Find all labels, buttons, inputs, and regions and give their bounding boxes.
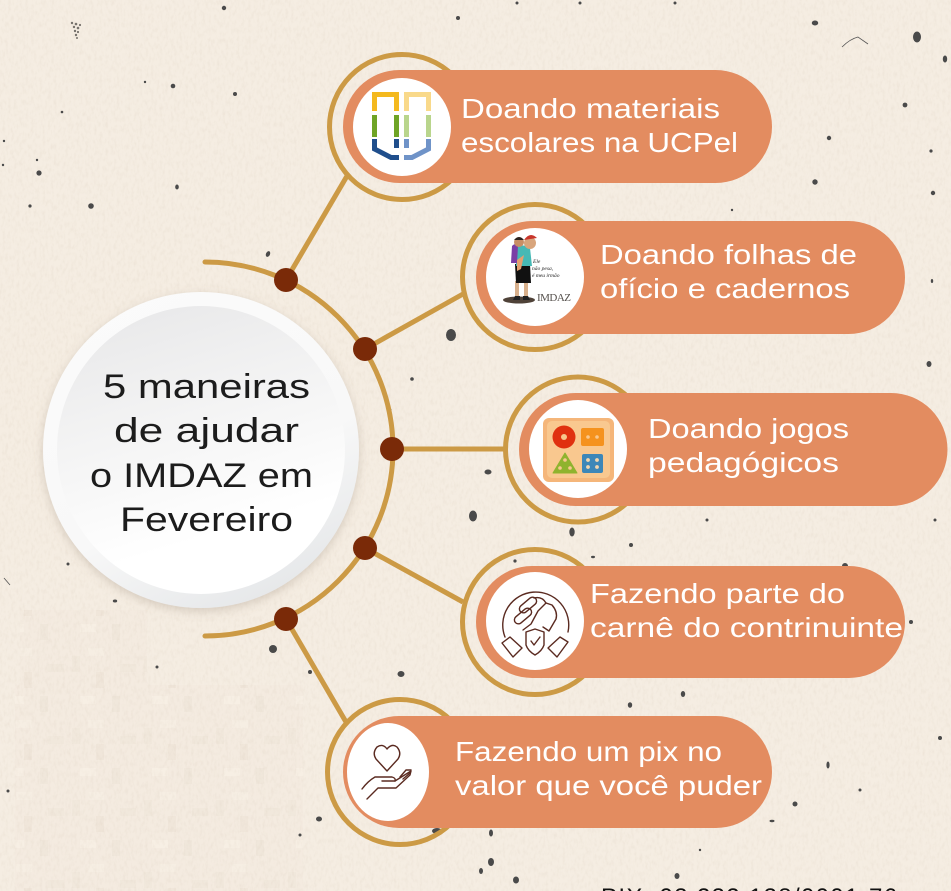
hand-drawn fibre marks [4, 37, 868, 585]
title: 5 maneiras [103, 368, 310, 406]
label: Fazendo um pix no [455, 736, 722, 767]
central circle with title [43, 292, 359, 608]
label [590, 578, 903, 643]
icon: IMDAZ logo [503, 235, 571, 304]
item 3: educational games [506, 377, 948, 522]
label: Doando folhas de [600, 239, 857, 270]
icon: IMDAZ logo: é meu irmão [532, 273, 560, 279]
icon: IMDAZ logo: Ele [532, 259, 541, 265]
icon: IMDAZ logo: IMDAZ [537, 292, 571, 304]
label [600, 239, 857, 304]
label: Doando materiais [461, 93, 720, 124]
label [455, 736, 762, 801]
title: Fevereiro [120, 501, 293, 539]
title: o IMDAZ em [90, 457, 313, 495]
label: escolares na UCPel [461, 127, 738, 158]
label: Fazendo parte do [590, 578, 845, 609]
connector lines [286, 176, 504, 722]
arc nodes [274, 268, 404, 631]
label [648, 413, 849, 478]
label [461, 93, 738, 158]
icon: UCPel logo [374, 94, 428, 158]
title: de ajudar [114, 412, 299, 450]
icon: IMDAZ logo: não pesa, [532, 266, 554, 272]
label: ofício e cadernos [600, 273, 850, 304]
icon: hand holding heart [362, 745, 411, 799]
item 4: contributor booklet [462, 550, 905, 694]
icon: joined hands and shield [502, 592, 569, 657]
label: Doando jogos [648, 413, 849, 444]
item 2: paper and notebooks [462, 204, 905, 350]
title [90, 368, 313, 539]
icon: shape puzzle [543, 418, 614, 482]
central arc [205, 262, 393, 636]
label: valor que você puder [455, 770, 762, 801]
paint fleck [71, 22, 81, 39]
label: pedagógicos [648, 447, 839, 478]
item 5: pix donation [328, 700, 772, 844]
item 1: school supplies [330, 54, 772, 200]
label: carnê do contrinuinte [590, 612, 903, 643]
